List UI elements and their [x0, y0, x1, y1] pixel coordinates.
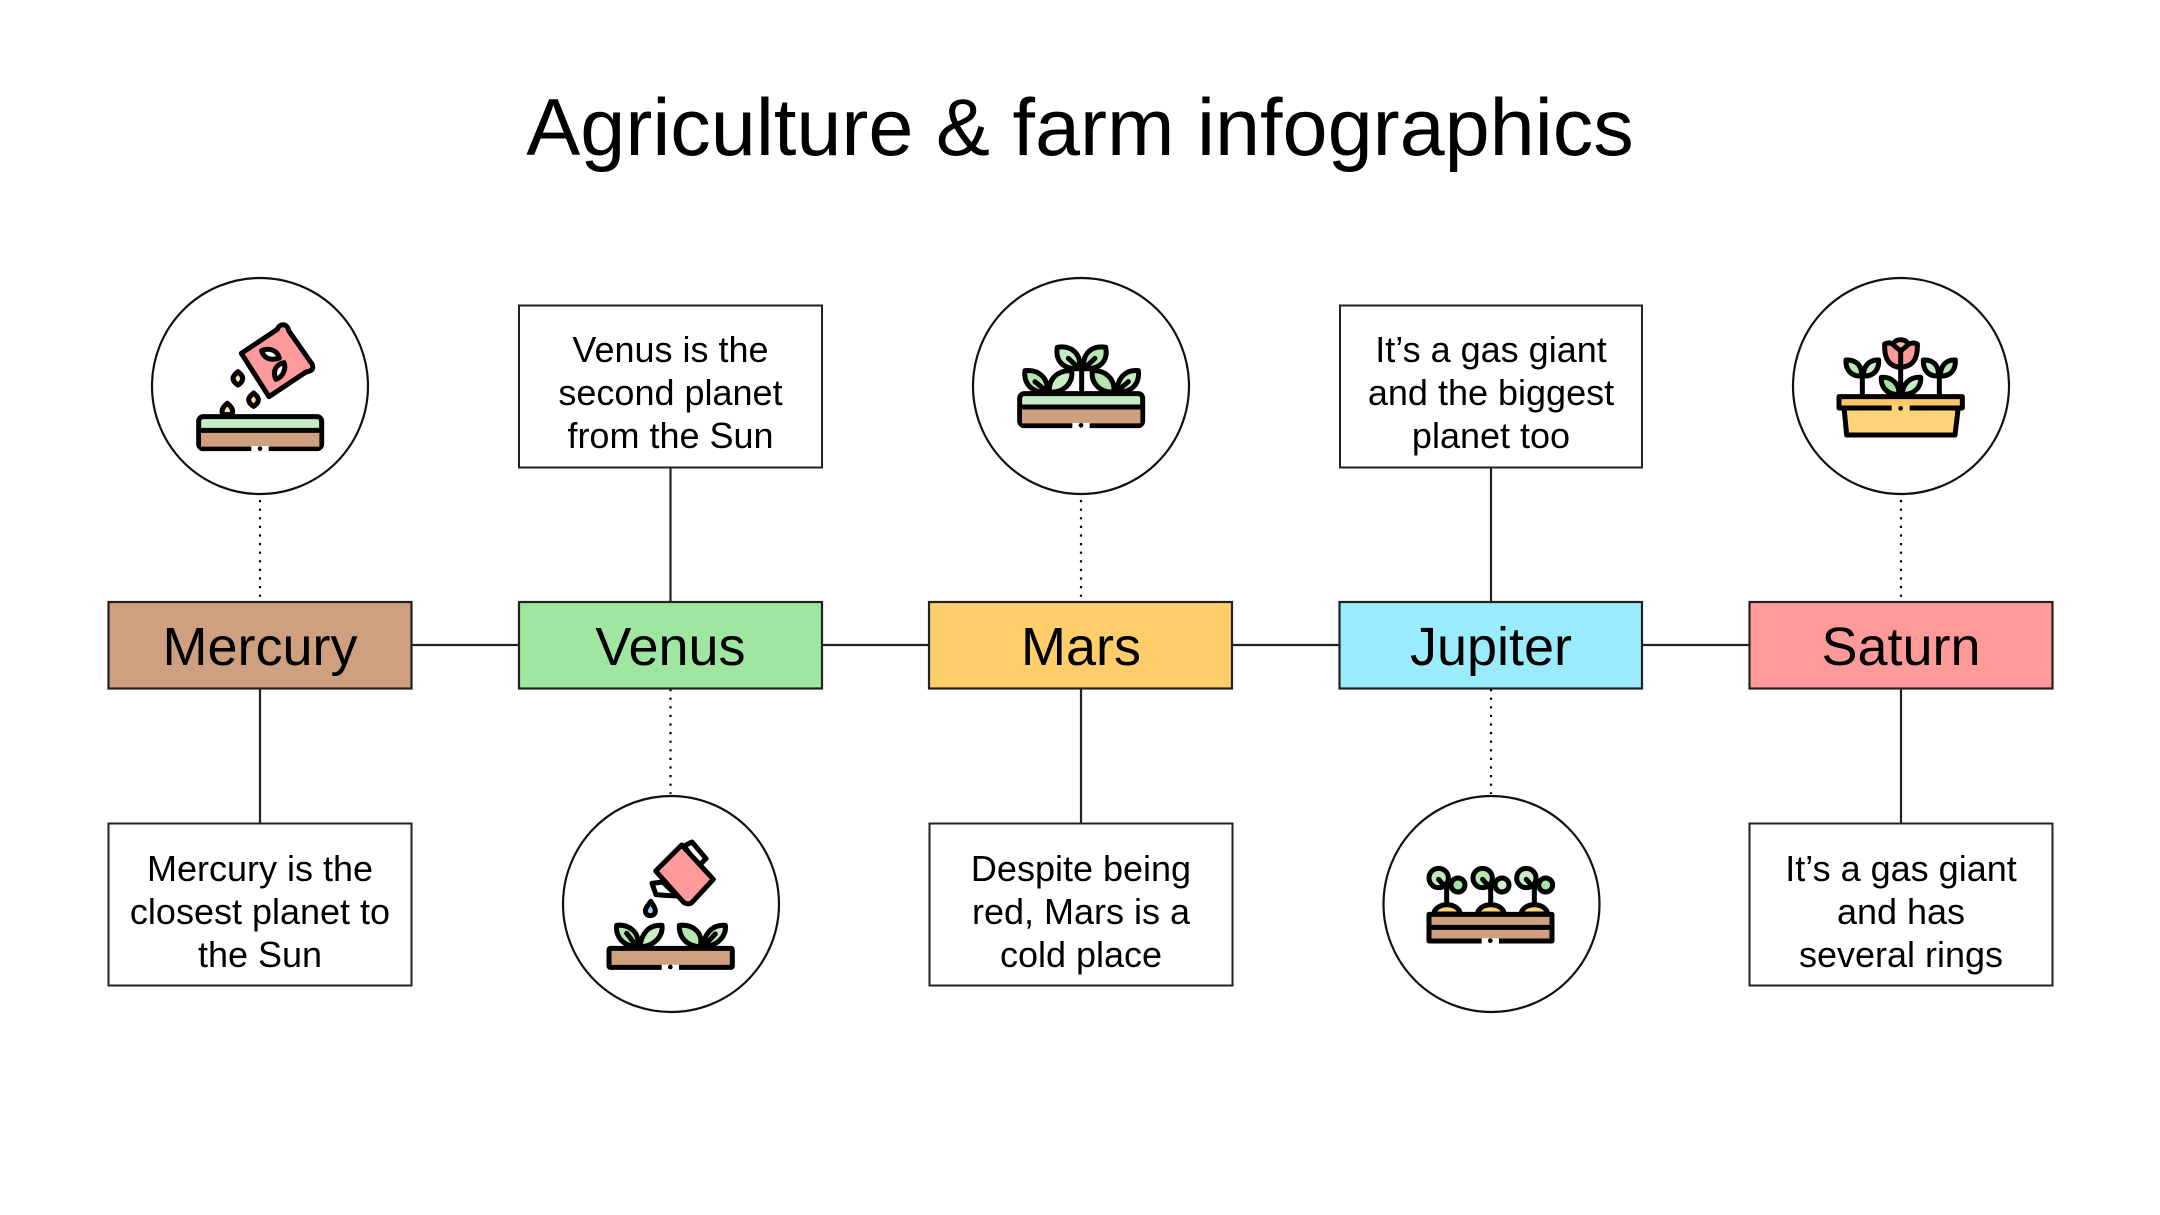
text block: Jupiter description [1340, 306, 1642, 468]
text block: Mercury description: Mercury is the [147, 848, 373, 889]
dotted connectors [260, 500, 1901, 794]
panel: Mars heading [929, 602, 1232, 688]
text block: Jupiter description: planet too [1412, 415, 1570, 456]
text block: Mercury description: closest planet to [130, 891, 390, 932]
text block: Venus description: Venus is the [572, 329, 769, 370]
text block: Mercury description: the Sun [198, 934, 322, 975]
panel: Mercury heading: Mercury [162, 617, 358, 677]
text block: Venus description: second planet [558, 372, 783, 413]
title: Agriculture & farm infographics [526, 83, 1634, 173]
text block: Jupiter description: and the biggest [1368, 372, 1614, 413]
text block: Venus description [519, 306, 822, 468]
icon: watering can over plants [563, 796, 779, 1012]
text block: Saturn description: It’s a gas giant [1785, 848, 2017, 889]
panel: Venus heading: Venus [595, 617, 746, 677]
panel: Venus heading [519, 602, 822, 688]
text block: Saturn description: several rings [1799, 934, 2003, 975]
text block: Jupiter description: It’s a gas giant [1375, 329, 1607, 370]
text block: Mars description: red, Mars is a [972, 891, 1191, 932]
icon: seed bag pouring onto soil [152, 278, 368, 494]
text block: Mars description [930, 824, 1232, 986]
panel: Jupiter heading [1340, 602, 1642, 688]
panel: Mercury heading [108, 602, 412, 688]
text block: Mars description: Despite being [971, 848, 1191, 889]
text block: Mars description: cold place [1000, 934, 1162, 975]
icon: tulip in planter [1793, 278, 2009, 494]
panel: Saturn heading [1750, 602, 2052, 688]
text block: Venus description: from the Sun [567, 415, 774, 456]
icon: seedlings in soil bed [973, 278, 1189, 494]
text block: Mercury description [108, 824, 412, 986]
panel: Jupiter heading: Jupiter [1410, 617, 1572, 677]
text block: Saturn description: and has [1837, 891, 1965, 932]
icon: sprouts in raised bed [1384, 796, 1600, 1012]
horizontal timeline connectors [412, 644, 1750, 646]
text block: Saturn description [1750, 824, 2052, 986]
panel: Saturn heading: Saturn [1821, 617, 1981, 677]
vertical solid connectors [260, 468, 1901, 823]
panel: Mars heading: Mars [1021, 617, 1141, 677]
